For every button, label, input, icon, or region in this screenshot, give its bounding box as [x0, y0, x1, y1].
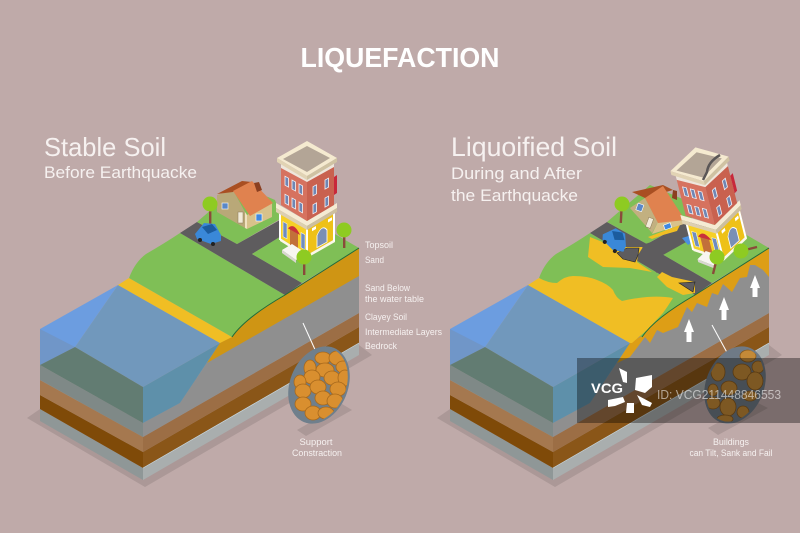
layer labels: Sand Below — [365, 283, 410, 293]
caption: support construction — [292, 437, 342, 458]
watermark logo: VCG — [591, 380, 623, 396]
beach strip — [118, 278, 232, 343]
heading: stable soil: Stable Soil — [44, 132, 166, 162]
layer labels: Bedrock — [365, 341, 397, 351]
soil block and water — [27, 248, 372, 487]
tilted tower building — [665, 140, 754, 273]
heading: liquified soil — [451, 132, 617, 205]
road — [590, 220, 712, 295]
soil block and water — [437, 248, 782, 487]
sand layer — [207, 248, 359, 363]
car — [195, 223, 221, 246]
fallen tree — [734, 244, 757, 258]
heading: liquified soil: During and After — [451, 164, 582, 183]
watermark logo — [591, 368, 652, 413]
circle shadow — [297, 404, 352, 436]
green slope — [129, 233, 285, 337]
arrow three — [750, 275, 760, 297]
layer labels: Intermediate Layers — [365, 327, 442, 337]
lawn by tower — [252, 219, 359, 283]
layer labels: Topsoil — [365, 240, 393, 250]
large sand patch — [528, 276, 673, 343]
sand near edge — [657, 272, 695, 295]
pointer line — [712, 325, 730, 358]
caption: support construction: Support — [300, 437, 333, 447]
tree by house — [202, 196, 218, 224]
cracked road patch — [642, 223, 695, 273]
lawn by house — [607, 185, 692, 244]
tree front — [710, 250, 724, 274]
panel: stable soil diagram — [27, 141, 372, 487]
watermark id: ID: VCG211448846553 — [657, 388, 781, 402]
heading: stable soil — [44, 132, 197, 182]
roof crack — [703, 155, 720, 180]
layer labels: Clayey Soil — [365, 312, 407, 322]
panel: liquified soil diagram — [437, 140, 782, 487]
circle: liquified soil — [704, 346, 766, 424]
green slope — [539, 233, 695, 337]
infographic canvas — [28, 48, 800, 487]
layer labels — [365, 240, 442, 351]
sand near house — [648, 225, 680, 239]
jagged sand layer — [617, 248, 769, 363]
house — [217, 181, 273, 229]
circle shadow — [708, 402, 768, 435]
green edge line — [232, 248, 359, 337]
lawn by house — [197, 185, 282, 244]
arrow one — [684, 319, 694, 342]
arrow two — [719, 297, 729, 320]
caption: buildings can tilt — [690, 437, 772, 458]
layer labels: Sand — [365, 255, 384, 265]
tree front — [296, 250, 312, 275]
watermark band — [577, 358, 800, 423]
heading: liquified soil: Liquoified Soil — [451, 132, 617, 162]
sinkhole two — [679, 282, 695, 292]
tower building — [276, 141, 337, 263]
tilted house — [630, 185, 685, 234]
lawn by tower — [662, 219, 769, 283]
green edge line — [642, 248, 769, 337]
layer labels: the water table — [365, 294, 424, 304]
tree by house — [614, 196, 630, 223]
caption: buildings can tilt: can Tilt, Sank and Fail — [690, 448, 772, 458]
road — [180, 220, 302, 295]
title: LIQUEFACTION — [300, 42, 500, 73]
pointer line — [303, 323, 317, 354]
heading: liquified soil: the Earthquacke — [451, 186, 578, 205]
caption: support construction: Constraction — [292, 448, 342, 458]
circle: support construction soil — [288, 346, 350, 424]
caption: buildings can tilt: Buildings — [713, 437, 749, 447]
sunken car — [598, 224, 631, 256]
puddle — [682, 235, 696, 245]
sand near road — [588, 237, 652, 272]
sinkhole one — [617, 248, 639, 262]
tree right — [336, 222, 352, 248]
heading: stable soil: Before Earthquacke — [44, 163, 197, 182]
